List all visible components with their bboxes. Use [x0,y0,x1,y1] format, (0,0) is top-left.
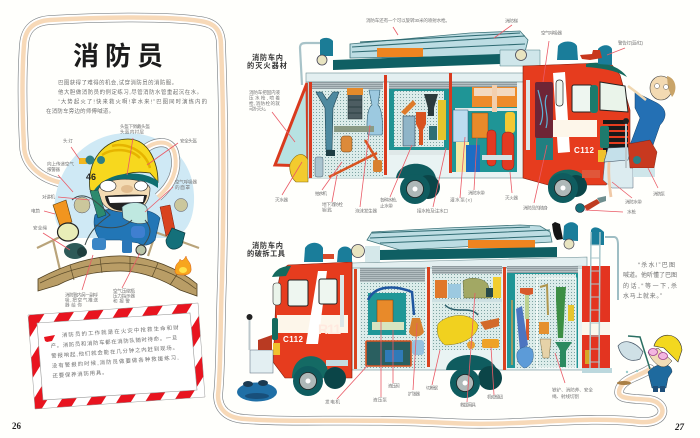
fire truck: rescue tools [237,222,618,402]
bridge [38,256,197,296]
label: boots and suit [65,255,98,308]
warning text: 没有警报的时候,消防员做要做各种救援练习, [52,353,179,370]
label: foam generator: 泡沫发生器 [355,208,377,214]
label: breathing apparatus [145,178,197,212]
label: radio: 对讲机 [42,194,55,200]
label: safety helmet: 安全头盔 [180,138,197,144]
gauge [136,245,146,255]
label: firefighter tools: 消防员的随身 [523,204,548,212]
label: safety helmet [147,138,197,165]
label: fire pump [648,168,665,198]
body [308,82,524,178]
red rear side and ladder [582,232,612,373]
flashlight [53,200,78,241]
roof strip [352,257,587,270]
label: cutting saw [426,350,440,392]
label: hydraulic pump: 液压泵 [373,396,387,404]
head lamp [79,156,105,164]
heading: rescue tools: 的破拆工具 [247,249,285,258]
label: front hose: 消防水带 [625,198,642,206]
nozzle [160,205,185,249]
top truck description: 压水枪,喷着 [249,94,280,102]
speech text: 的话,“等一下,杀 [623,282,677,290]
firefighter callouts [31,123,197,308]
hand left [74,197,90,213]
label: radio [42,194,90,200]
front pump and box [603,118,657,197]
label: pump: 抽水机 [315,190,327,197]
label: firefighter tools [523,145,548,212]
label: hydrant ladder: 消防梯 [505,18,518,24]
compartment 2 [389,82,451,155]
label: pump [315,162,342,197]
label: chain saw: 机动锯钮 [487,394,503,400]
cab: R11 [318,321,341,337]
label: head lamp: 头灯 [63,138,73,144]
rear wheel [446,355,502,398]
roof strip [306,73,524,82]
label: nozzle: 水枪 [627,208,636,216]
intro text block [46,78,207,115]
top truck description: 消防车把固内液 [249,89,280,96]
label: safety rope [33,224,70,250]
label: fire hose: 消防水带 [468,190,485,196]
label: hydrant ladder [494,18,518,38]
warning text: 产。消防员和消防车都在消防队随时待命。一旦 [50,333,178,350]
label: water inlet [417,148,448,214]
compartment 1 [354,267,430,369]
illustration: firefighter on bridge: 46 [86,172,96,182]
label: boots and suit: 吸,把空气推送 [65,296,98,304]
label: head lamp [63,138,80,160]
label: torch: 电筒 [31,208,40,214]
blue hose coil [237,380,277,402]
speech text: 喊道。他听懂了巴图 [623,271,677,279]
label: hydraulic cutter [388,330,400,390]
top truck description [249,89,295,142]
small firefighter with bucket [617,335,682,392]
label: shovel and axe: 铁铲、消防斧、安全 [552,386,593,394]
page number 27: 27 [674,422,684,432]
cab [272,262,352,396]
compartment 1 [309,75,387,178]
illustration: firefighter on bridge [37,133,199,296]
label: breathing apparatus: 的面罩 [175,184,190,191]
helmet [89,139,158,194]
ladder [365,225,557,262]
icon: red stamp [44,335,55,342]
cab: C112 [283,335,304,344]
label: water pump: 灌水泵(x) [450,196,472,204]
label: safety rope: 安全绳 [33,224,47,232]
warning text: 消防员的工作就是在火灾中抢救生命和财 [62,323,179,339]
intro text block: 在消防车旁边的师傅喊道。 [46,107,114,115]
label: air cylinder: 压力指示器 [113,292,135,300]
label: air apparatus: 空气呼吸器 [541,30,562,36]
label: rescue kit: 救援用具 [460,402,476,408]
radio [90,190,106,218]
rear lamp and pipe [300,38,333,85]
fire truck: fire-fighting equipment [275,31,675,212]
sky halo [54,133,194,238]
face [98,179,150,212]
title: 消防员 [73,41,163,71]
intro text block: 巴图获得了难得的机会,试穿消防员的消防服。 [58,78,177,86]
label: water inlet: 接水枪及注水口 [417,208,448,214]
label: extinguisher bag [275,162,302,204]
ladder [333,31,540,70]
compartment 2 [432,266,502,350]
label: boots and suit: 器给你 [65,302,82,308]
page number 26: 26 [12,421,22,431]
label: water cannon: 消防车还有一个可以旋转30米的喷射水枪。 [366,17,450,24]
label: generator [325,365,368,406]
compartment 3 [449,73,517,173]
air tubes [72,196,150,246]
label: water cannon [366,17,450,35]
top truck callouts [275,17,665,216]
label: spreader [408,323,420,398]
label: hydrant key: 钥匙 [322,206,332,214]
label: hoses [380,145,412,210]
speech text: “杀水!”巴图 [638,261,675,269]
label: foam generator [355,125,377,214]
label: helmet lining [120,123,150,175]
label: spreader: 扩张器 [408,390,420,398]
mechanic on front [628,76,675,148]
label: hydraulic cutter: 液压剪 [388,382,400,390]
label: extinguisher: 灭火器 [505,196,518,202]
label: air alarm [47,160,74,192]
intro text block: “大势起火了!快来救火啊!拿水来!”巴图同时演练内的 [58,98,207,106]
label: hydrant key [322,175,343,214]
label: boots and suit: 消防靴内另一副呼 [65,292,98,298]
cab roof lamps [557,42,612,65]
cab: C112 [574,146,595,155]
label: hoses: 止水带 [380,202,393,210]
speech text: 水马上就来。” [623,292,662,300]
label: warning light [607,40,643,55]
label: air alarm: 向上传递空气 [47,160,74,168]
body suit [94,208,160,245]
label: shovel and axe: 绳、射线切割 [552,393,579,400]
label: chain saw [487,347,503,400]
label: air apparatus [541,30,562,82]
rear wheel [396,164,440,204]
label: extinguisher bag: 灭水器 [275,196,288,204]
yellow bag [290,154,308,182]
rope coil [64,243,87,259]
label: water pump [450,137,472,204]
heading: fire-fighting equipment: 消防车内 [252,53,283,62]
warning text [50,323,182,380]
heading: fire-fighting equipment: 的灭火器材 [247,61,287,70]
label: rescue kit [460,293,476,408]
label: helmet lining: 头盔内衬层 [120,128,144,136]
body [352,268,584,370]
top truck description: 枪,消防栓的就 [249,100,280,107]
railing [37,232,199,270]
nozzle on ground [576,196,606,212]
intro text block: 他大胆做消防员的例定练习,尽管消防水管重起沉在水。 [58,88,202,96]
hand right [174,198,188,212]
label: front hose [612,182,642,206]
label: air cylinder: 和报警 [113,298,130,304]
label: torch [31,208,55,214]
cab [523,63,630,203]
label: hydraulic pump [373,320,387,404]
bird on roof [552,222,563,240]
bottom truck callouts [325,293,593,408]
back hose loop [142,143,176,197]
air mask [122,203,148,224]
top truck description: 可扑灭火。 [249,106,269,112]
label: cutting saw: 切断锯 [426,384,438,392]
rear lamp [563,222,618,300]
label: fire pump: 消防泵 [653,190,665,198]
warning text: 还要保养消防用具。 [52,368,108,380]
label: helmet lining: 头盔下佩戴头盔 [120,123,150,130]
label: air cylinder: 空气压缩瓶 [113,288,135,294]
label: extinguisher [505,172,518,202]
warning text: 警报响起,他们就会能在几分钟之内赶到现场。 [51,343,178,360]
speech text [623,261,677,300]
label: shovel and axe [552,353,593,400]
heading: rescue tools: 消防车内 [252,241,283,250]
label: warning light: 警告灯(蓝/红) [618,40,643,46]
label: hoses: 各种水枪、 [380,196,400,204]
heading: fire-fighting equipment [247,53,287,70]
label: generator: 发电机 [325,398,340,406]
heading: rescue tools [247,241,285,258]
warning panel [28,303,205,409]
front bumper box [246,314,273,373]
label: air alarm: 报警器 [47,166,60,173]
label: breathing apparatus: 空气呼吸器 [175,178,197,186]
flame [175,256,191,275]
cab roof lamps [304,243,364,262]
label: hydrant key: 地下消防栓 [322,201,343,208]
label: air cylinder [113,253,140,304]
compartment 3 [503,266,578,370]
label: nozzle [585,208,636,216]
label: fire hose [468,138,485,196]
rear triangle [275,83,308,166]
